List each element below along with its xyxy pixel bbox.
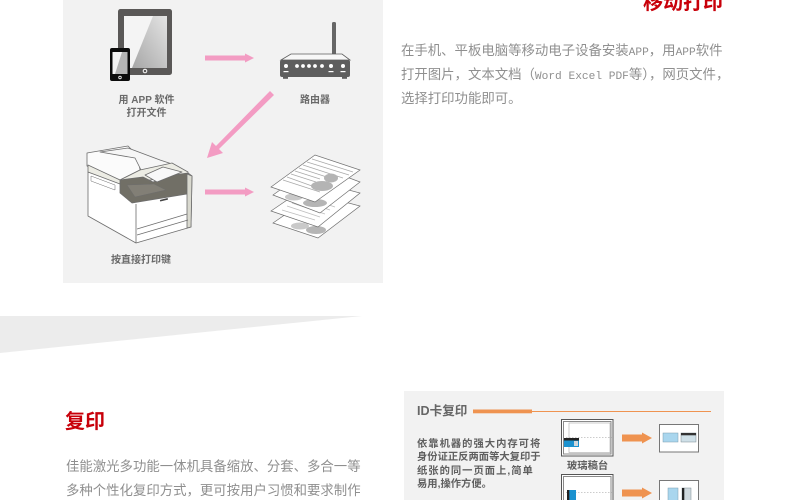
arrow: second side to result — [622, 488, 652, 498]
text block: mobile printing description — [401, 43, 729, 108]
result: cards stacked on page — [660, 480, 698, 500]
text: ID card copy description: 依靠机器的强大内存可将 — [417, 439, 541, 450]
label: glass platen: 玻璃稿台 — [567, 461, 608, 472]
panel heading: ID card copy: ID卡复印 — [417, 404, 467, 418]
panel: ID card copy — [404, 391, 724, 500]
label: press print button: 按直接打印键 — [111, 255, 171, 266]
label: open file in app: 打开文件 — [126, 108, 166, 119]
icon: wifi router — [280, 22, 350, 79]
arrow: printer to pages — [205, 188, 254, 196]
text: ID card copy description — [417, 438, 541, 490]
glass platen, first side — [562, 420, 613, 456]
text: ID card copy description: 易用,操作方便。 — [417, 479, 492, 490]
icon: tablet — [118, 9, 172, 75]
icon: stacked printed pages — [271, 155, 360, 238]
panel: mobile printing diagram — [63, 0, 383, 283]
icon: phone — [110, 48, 130, 81]
glass platen, second side — [562, 474, 613, 500]
label: open file in app: 用 APP 软件 — [119, 95, 174, 106]
text: ID card copy description: 身份证正反两面等大复印于 — [417, 452, 541, 463]
text: ID card copy description: 纸张的同一页面上,简单 — [417, 466, 534, 477]
heading rule — [473, 410, 711, 500]
text block: mobile printing description: 在手机、平板电脑等移动电子设备安装APP，用APP软件 — [401, 45, 723, 60]
text block: mobile printing description: 打开图片，文本文档（Word Excel PDF等），网页文件， — [401, 69, 729, 84]
arrow: router to printer — [207, 91, 274, 158]
text block: mobile printing description: 选择打印功能即可。 — [401, 93, 522, 108]
icon: printer — [87, 146, 192, 243]
label: open file in app — [118, 94, 174, 119]
label: router: 路由器 — [300, 95, 330, 106]
heading: copying: 复印 — [65, 411, 105, 433]
arrow: phone to router — [205, 54, 254, 62]
arrow: first side to result — [622, 432, 652, 444]
diagram artwork — [86, 9, 361, 244]
text block: copying description: 佳能激光多功能一体机具备缩放、分套、多合一等 — [66, 461, 361, 476]
text block: copying description: 多种个性化复印方式，更可按用户习惯和要求制作 — [66, 485, 361, 500]
text block: copying description — [66, 459, 361, 500]
result: cards side by side — [660, 424, 698, 452]
